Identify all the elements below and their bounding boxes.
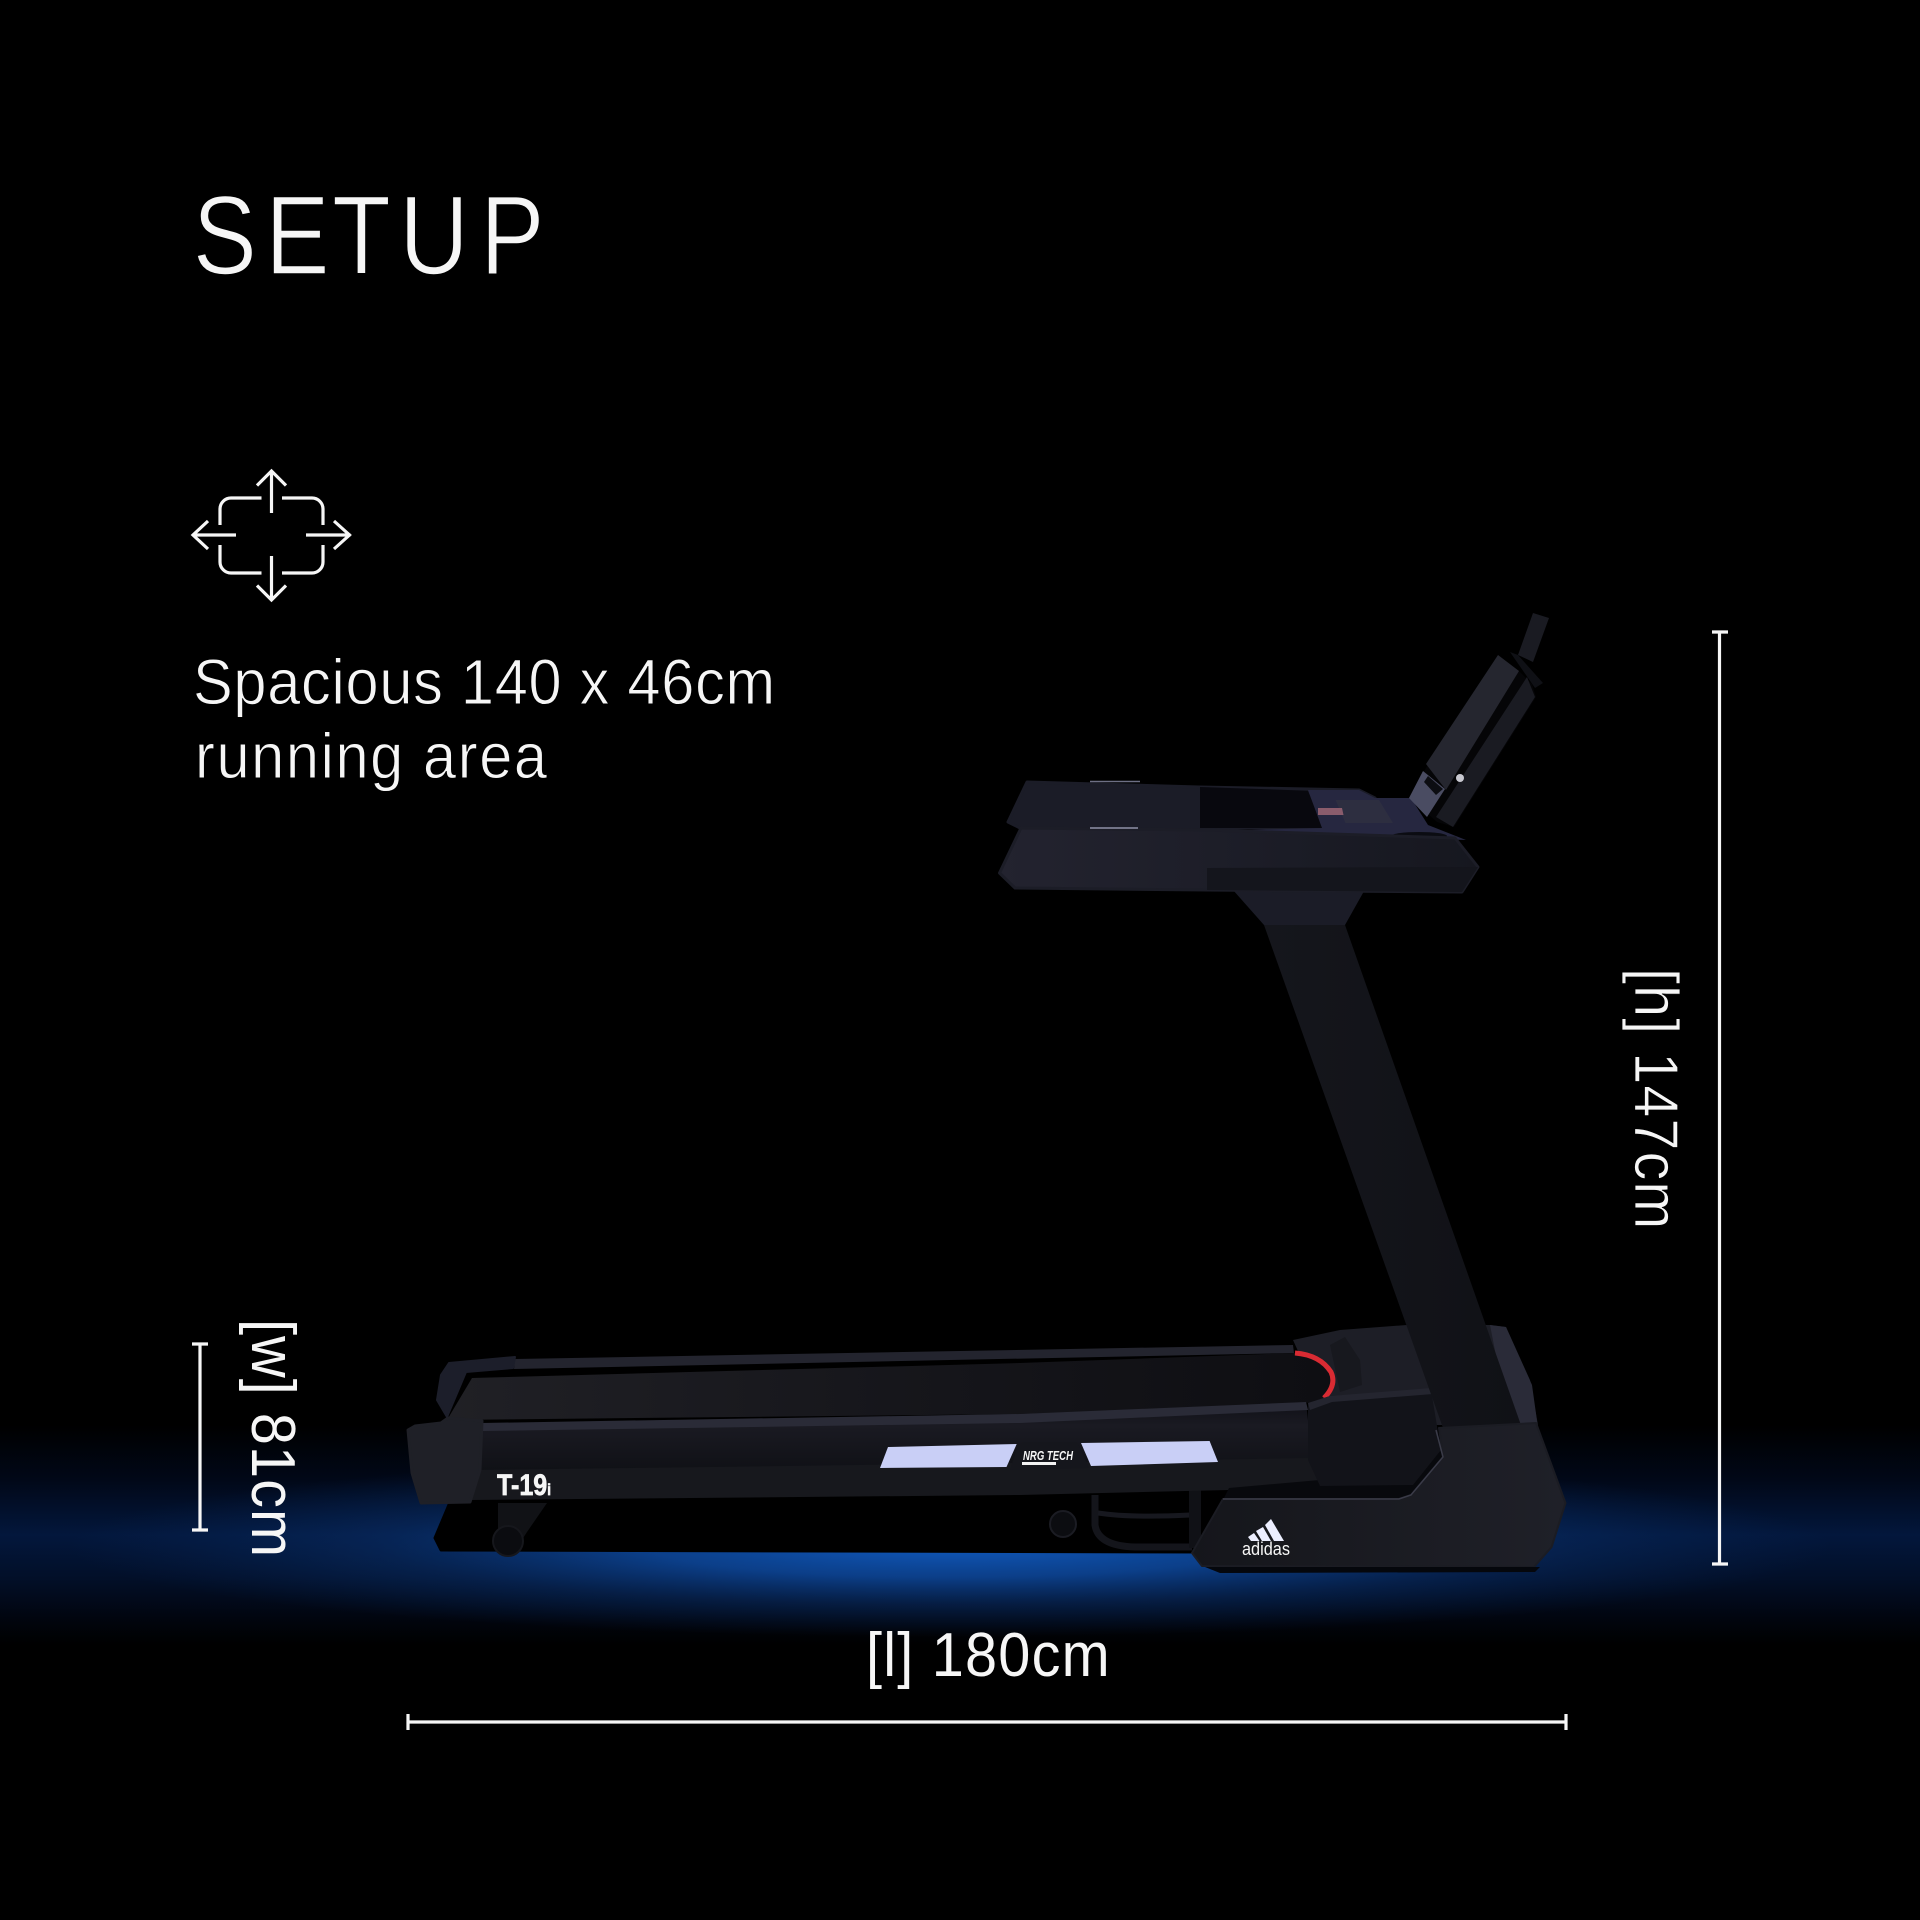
dimension: width: [w] 81cm <box>239 1319 308 1557</box>
deck lower frame <box>470 1455 1320 1500</box>
text: running area description: running area <box>195 721 548 792</box>
motor cover <box>1293 1325 1538 1425</box>
dark recess between housing and base <box>1223 1440 1445 1500</box>
console: near handrail <box>1000 782 1478 892</box>
console: far handrail <box>1008 782 1375 828</box>
dimension: height <box>1622 632 1728 1564</box>
text: running area description <box>193 647 775 792</box>
NRG TECH badge <box>1010 1442 1089 1470</box>
base foot <box>1192 1423 1566 1573</box>
blue accent panels <box>880 1444 1017 1468</box>
console: tablet holder <box>1409 613 1549 827</box>
running belt <box>447 1353 1334 1420</box>
title: SETUP <box>193 173 545 299</box>
dimension: length: [l] 180cm <box>866 1620 1110 1689</box>
icon: expand arrows around a rounded rectangle <box>192 470 350 600</box>
deck side rail <box>480 1402 1312 1470</box>
adidas logo: adidas <box>1242 1539 1290 1559</box>
rear under-deck mechanics <box>1050 1488 1201 1548</box>
dimension: width <box>192 1319 308 1557</box>
front transport wheel <box>493 1503 547 1556</box>
text: running area description: Spacious 140 x 46cm <box>193 647 775 718</box>
treadmill product illustration <box>408 613 1566 1573</box>
console: top surface and keypad <box>1209 790 1466 840</box>
adidas logo <box>1242 1519 1290 1559</box>
NRG TECH badge: NRG TECH <box>1023 1448 1073 1463</box>
model label: T-19i <box>497 1469 551 1502</box>
shadow under the deck <box>435 1490 1235 1552</box>
side motor housing <box>1308 1390 1441 1486</box>
far side rail and rear end cap <box>514 1345 1294 1369</box>
dimension: length <box>408 1620 1566 1730</box>
dimension: height: [h] 147cm <box>1622 968 1691 1229</box>
front end cap <box>408 1418 482 1503</box>
red roller accent <box>1295 1353 1333 1398</box>
upright and console stem <box>1264 925 1522 1428</box>
